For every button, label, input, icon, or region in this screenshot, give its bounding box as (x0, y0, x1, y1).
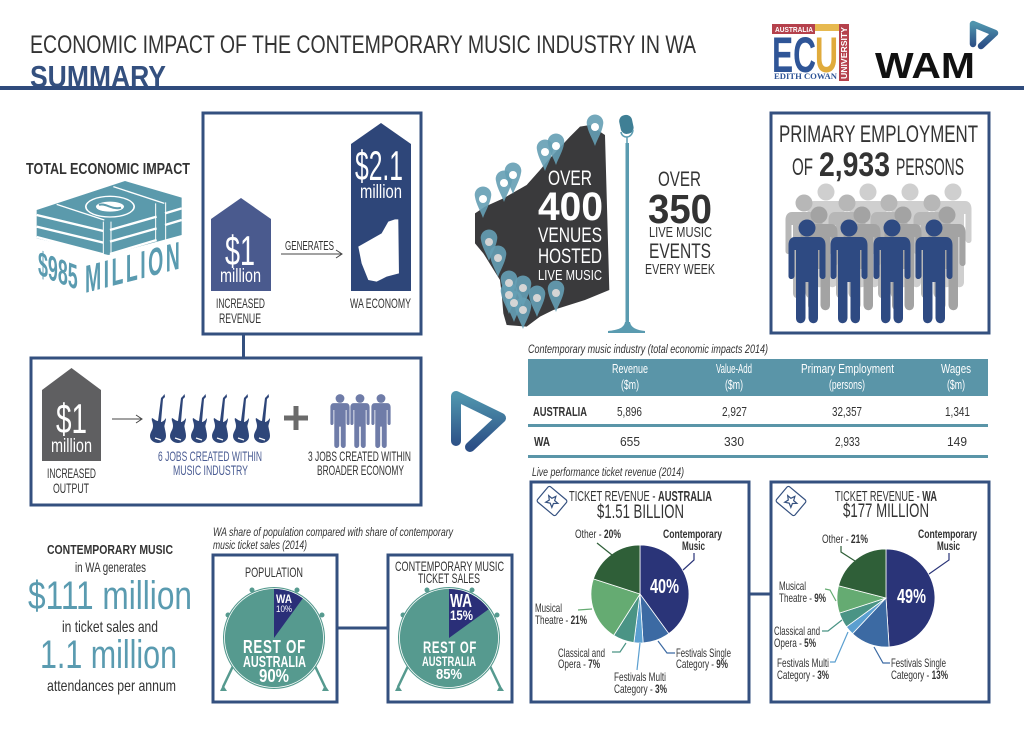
map: WA venues (475, 114, 609, 329)
panel: ticket revenue Australia: $1.51 BILLION (597, 502, 684, 523)
text: 3 jobs: BROADER ECONOMY (317, 462, 404, 478)
text: over 400 venues: VENUES (538, 224, 602, 247)
icon: money stack: MILLION (85, 233, 182, 302)
chart labels: Australia: Category - 9% (676, 657, 728, 671)
text: increased output: OUTPUT (53, 480, 89, 496)
table: total economic impacts: 330 (724, 434, 744, 449)
panel: population drum: POPULATION (245, 564, 303, 580)
logo: ECU: UNIVERSITY (840, 26, 849, 79)
chart: population drum pie (220, 587, 329, 691)
chart: ticket sales drum pie: 85% (436, 666, 462, 683)
chart labels: WA: Classical and (774, 624, 820, 638)
panel: ticket revenue Australia: 40% (650, 576, 679, 598)
text: over 350 events: EVENTS (649, 240, 711, 263)
panel: revenue multiplier (203, 113, 421, 334)
title: ECONOMIC IMPACT OF THE CONTEMPORARY MUSIC INDUSTRY IN WA (30, 31, 696, 59)
table: total economic impacts: Value-Add (716, 361, 752, 376)
text: over 400 venues: LIVE MUSIC (538, 267, 602, 284)
text: over 400 venues (538, 167, 603, 284)
icon: six guitars (150, 394, 270, 443)
icon: $2.1 million WA economy tag: $2.1 (355, 142, 403, 189)
logo: ECU: EC (772, 27, 816, 83)
table: total economic impacts: 5,896 (617, 404, 642, 419)
table: total economic impacts: ($m) (725, 377, 743, 392)
table: total economic impacts: 2,933 (835, 434, 860, 449)
chart labels: Australia (535, 527, 731, 696)
panel: ticket revenue Australia (531, 482, 749, 702)
heading: total economic impact: TOTAL ECONOMIC IMPACT (26, 161, 190, 178)
chart labels: WA: Category - 13% (891, 668, 948, 682)
table: total economic impacts: 1,341 (945, 404, 970, 419)
chart labels: WA: Musical (779, 579, 806, 593)
logo: ECU: U (815, 27, 838, 83)
text: increased output (47, 465, 96, 496)
chart labels: Australia: Festivals Multi (614, 670, 666, 684)
logo: WAM (875, 24, 995, 86)
chart labels: Australia: Musical (535, 601, 562, 615)
chart labels: Australia: Music (682, 539, 705, 553)
text: over 350 events: EVERY WEEK (645, 261, 715, 278)
chart labels: Australia: Contemporary (663, 527, 722, 541)
chart labels: WA: Other - 21% (822, 532, 868, 546)
chart labels: Australia: Classical and (558, 646, 605, 660)
caption: WA share: music ticket sales (2014) (213, 538, 307, 552)
logo: ECU: EDITH COWAN (774, 72, 837, 81)
text: increased output: INCREASED (47, 465, 96, 481)
icon: $1 million revenue tag (211, 198, 271, 291)
table: total economic impacts: (persons) (829, 377, 865, 392)
chart: population drum pie: AUSTRALIA (243, 654, 306, 671)
text: over 350 events: 350 (648, 186, 712, 232)
text: 6 jobs: MUSIC INDUSTRY (173, 462, 248, 478)
panel: ticket revenue WA: $177 MILLION (843, 501, 929, 522)
icon: $2.1 million WA economy tag: million (360, 182, 402, 203)
table: total economic impacts (528, 342, 988, 458)
chart: ticket sales drum pie: REST OF (423, 638, 477, 657)
chart: population drum pie: WA (276, 592, 292, 606)
chart labels: Australia: Category - 3% (614, 682, 667, 696)
text: 6 jobs: 6 JOBS CREATED WITHIN (158, 448, 262, 464)
chart: ticket sales drum pie: 15% (450, 607, 473, 623)
panel: primary employment: OF (792, 154, 813, 181)
icon: money stack (37, 181, 182, 302)
text: over 350 events (645, 168, 715, 278)
heading: summary: SUMMARY (30, 59, 166, 94)
icon: ticket (536, 486, 568, 516)
text block: ticket sales and attendance: CONTEMPORARY MUSIC (47, 542, 173, 557)
table: total economic impacts: 32,357 (832, 404, 862, 419)
arrow: generates (281, 238, 342, 258)
icon: ticket (775, 486, 807, 516)
chart labels: Australia: Opera - 7% (558, 657, 600, 671)
text: over 350 events: LIVE MUSIC (649, 224, 712, 241)
table: total economic impacts: ($m) (621, 377, 639, 392)
text block: ticket sales and attendance: 1.1 million (40, 633, 177, 677)
text: over 350 events: OVER (658, 168, 701, 191)
text block: ticket sales and attendance: attendances per annum (47, 678, 176, 695)
chart labels: WA: Opera - 5% (774, 636, 816, 650)
panel: primary employment (771, 113, 989, 333)
table: total economic impacts: 2,927 (722, 404, 747, 419)
panel: primary employment: 2,933 (819, 146, 890, 184)
caption: live performance: Live performance ticket revenue (2014) (532, 465, 684, 479)
icon: crowd of people (786, 184, 972, 323)
text: over 400 venues: OVER (548, 167, 592, 190)
chart labels: WA: Theatre - 9% (779, 591, 826, 605)
chart: population drum pie: 90% (259, 666, 289, 686)
arrow: generates: GENERATES (285, 238, 334, 253)
chart: population drum pie: REST OF (243, 637, 306, 657)
table: total economic impacts: AUSTRALIA (533, 404, 587, 419)
chart labels: WA: Music (937, 539, 960, 553)
chart labels: WA: Category - 3% (777, 668, 829, 682)
text: increased revenue: REVENUE (219, 310, 261, 326)
panel: ticket sales drum: CONTEMPORARY MUSIC (395, 558, 504, 574)
text: WA economy: WA ECONOMY (350, 295, 411, 311)
chart: ticket sales drum pie (395, 587, 504, 691)
chart labels: WA: Festivals Single (891, 656, 946, 670)
table: total economic impacts: Primary Employment (801, 361, 894, 376)
panel: ticket sales drum (388, 555, 512, 702)
logo: ECU: AUSTRALIA (775, 27, 813, 34)
panel: ticket revenue WA (771, 482, 989, 702)
text block: ticket sales and attendance: $111 million (28, 574, 192, 618)
text: 3 jobs: 3 JOBS CREATED WITHIN (308, 448, 411, 464)
panel: ticket revenue Australia: TICKET REVENUE - AUSTRALIA (569, 488, 712, 505)
table: total economic impacts: 655 (620, 434, 640, 449)
panel: output and jobs (31, 358, 421, 505)
table: total economic impacts: WA (534, 434, 550, 449)
icon: $1 million output tag: million (51, 436, 92, 457)
text: over 400 venues: 400 (538, 185, 603, 229)
logo: WAM: WAM (875, 45, 975, 86)
chart labels: Australia: Other - 20% (575, 527, 621, 541)
chart labels: WA (774, 527, 977, 682)
text: increased revenue: INCREASED (216, 295, 265, 311)
chart: Australia pie (591, 545, 689, 643)
icon: $1 million output tag (42, 368, 101, 461)
chart: ticket sales drum pie: WA (450, 591, 472, 611)
text: 6 jobs (158, 448, 262, 478)
text: over 400 venues: HOSTED (538, 245, 602, 268)
icon: $2.1 million WA economy tag (351, 123, 411, 291)
text block: ticket sales and attendance: in ticket sales and (62, 619, 158, 636)
table: total economic impacts: Wages (941, 361, 971, 376)
text block: ticket sales and attendance: in WA generates (75, 559, 146, 575)
table: total economic impacts: ($m) (947, 377, 965, 392)
icon: microphone (608, 114, 645, 333)
text block: ticket sales and attendance (28, 542, 192, 695)
icon: three people (330, 394, 391, 448)
chart: WA pie (837, 549, 935, 647)
table: total economic impacts: Revenue (612, 361, 648, 376)
chart labels: WA: Festivals Multi (777, 656, 829, 670)
text: 3 jobs (308, 448, 411, 478)
icon: $1 million revenue tag: $1 (225, 227, 255, 274)
caption: WA share (213, 525, 454, 552)
map pins (475, 114, 603, 329)
table: total economic impacts: 149 (947, 434, 967, 449)
caption: WA share: WA share of population compared with share of contemporary (213, 525, 454, 539)
panel: population drum (213, 555, 337, 702)
panel: ticket revenue WA: TICKET REVENUE - WA (835, 488, 937, 505)
panel: ticket revenue WA: 49% (897, 586, 926, 608)
chart: population drum pie: 10% (276, 604, 292, 614)
panel: primary employment: PERSONS (896, 154, 964, 181)
panel: ticket sales drum: TICKET SALES (418, 570, 480, 586)
icon: $1 million revenue tag: million (220, 266, 261, 287)
table: total economic impacts: Contemporary music industry (total economic impacts 2014) (528, 342, 768, 356)
chart labels: WA: Contemporary (918, 527, 977, 541)
chart: ticket sales drum pie: AUSTRALIA (422, 653, 476, 669)
arrow (112, 415, 142, 423)
icon: money stack: $985 (38, 243, 78, 297)
text: increased revenue (216, 295, 265, 326)
chart labels: Australia: Theatre - 21% (535, 613, 587, 627)
chart labels: Australia: Festivals Single (676, 646, 731, 660)
icon: play arrow (456, 396, 501, 447)
icon: $1 million output tag: $1 (56, 395, 87, 442)
icon: plus (284, 406, 308, 430)
